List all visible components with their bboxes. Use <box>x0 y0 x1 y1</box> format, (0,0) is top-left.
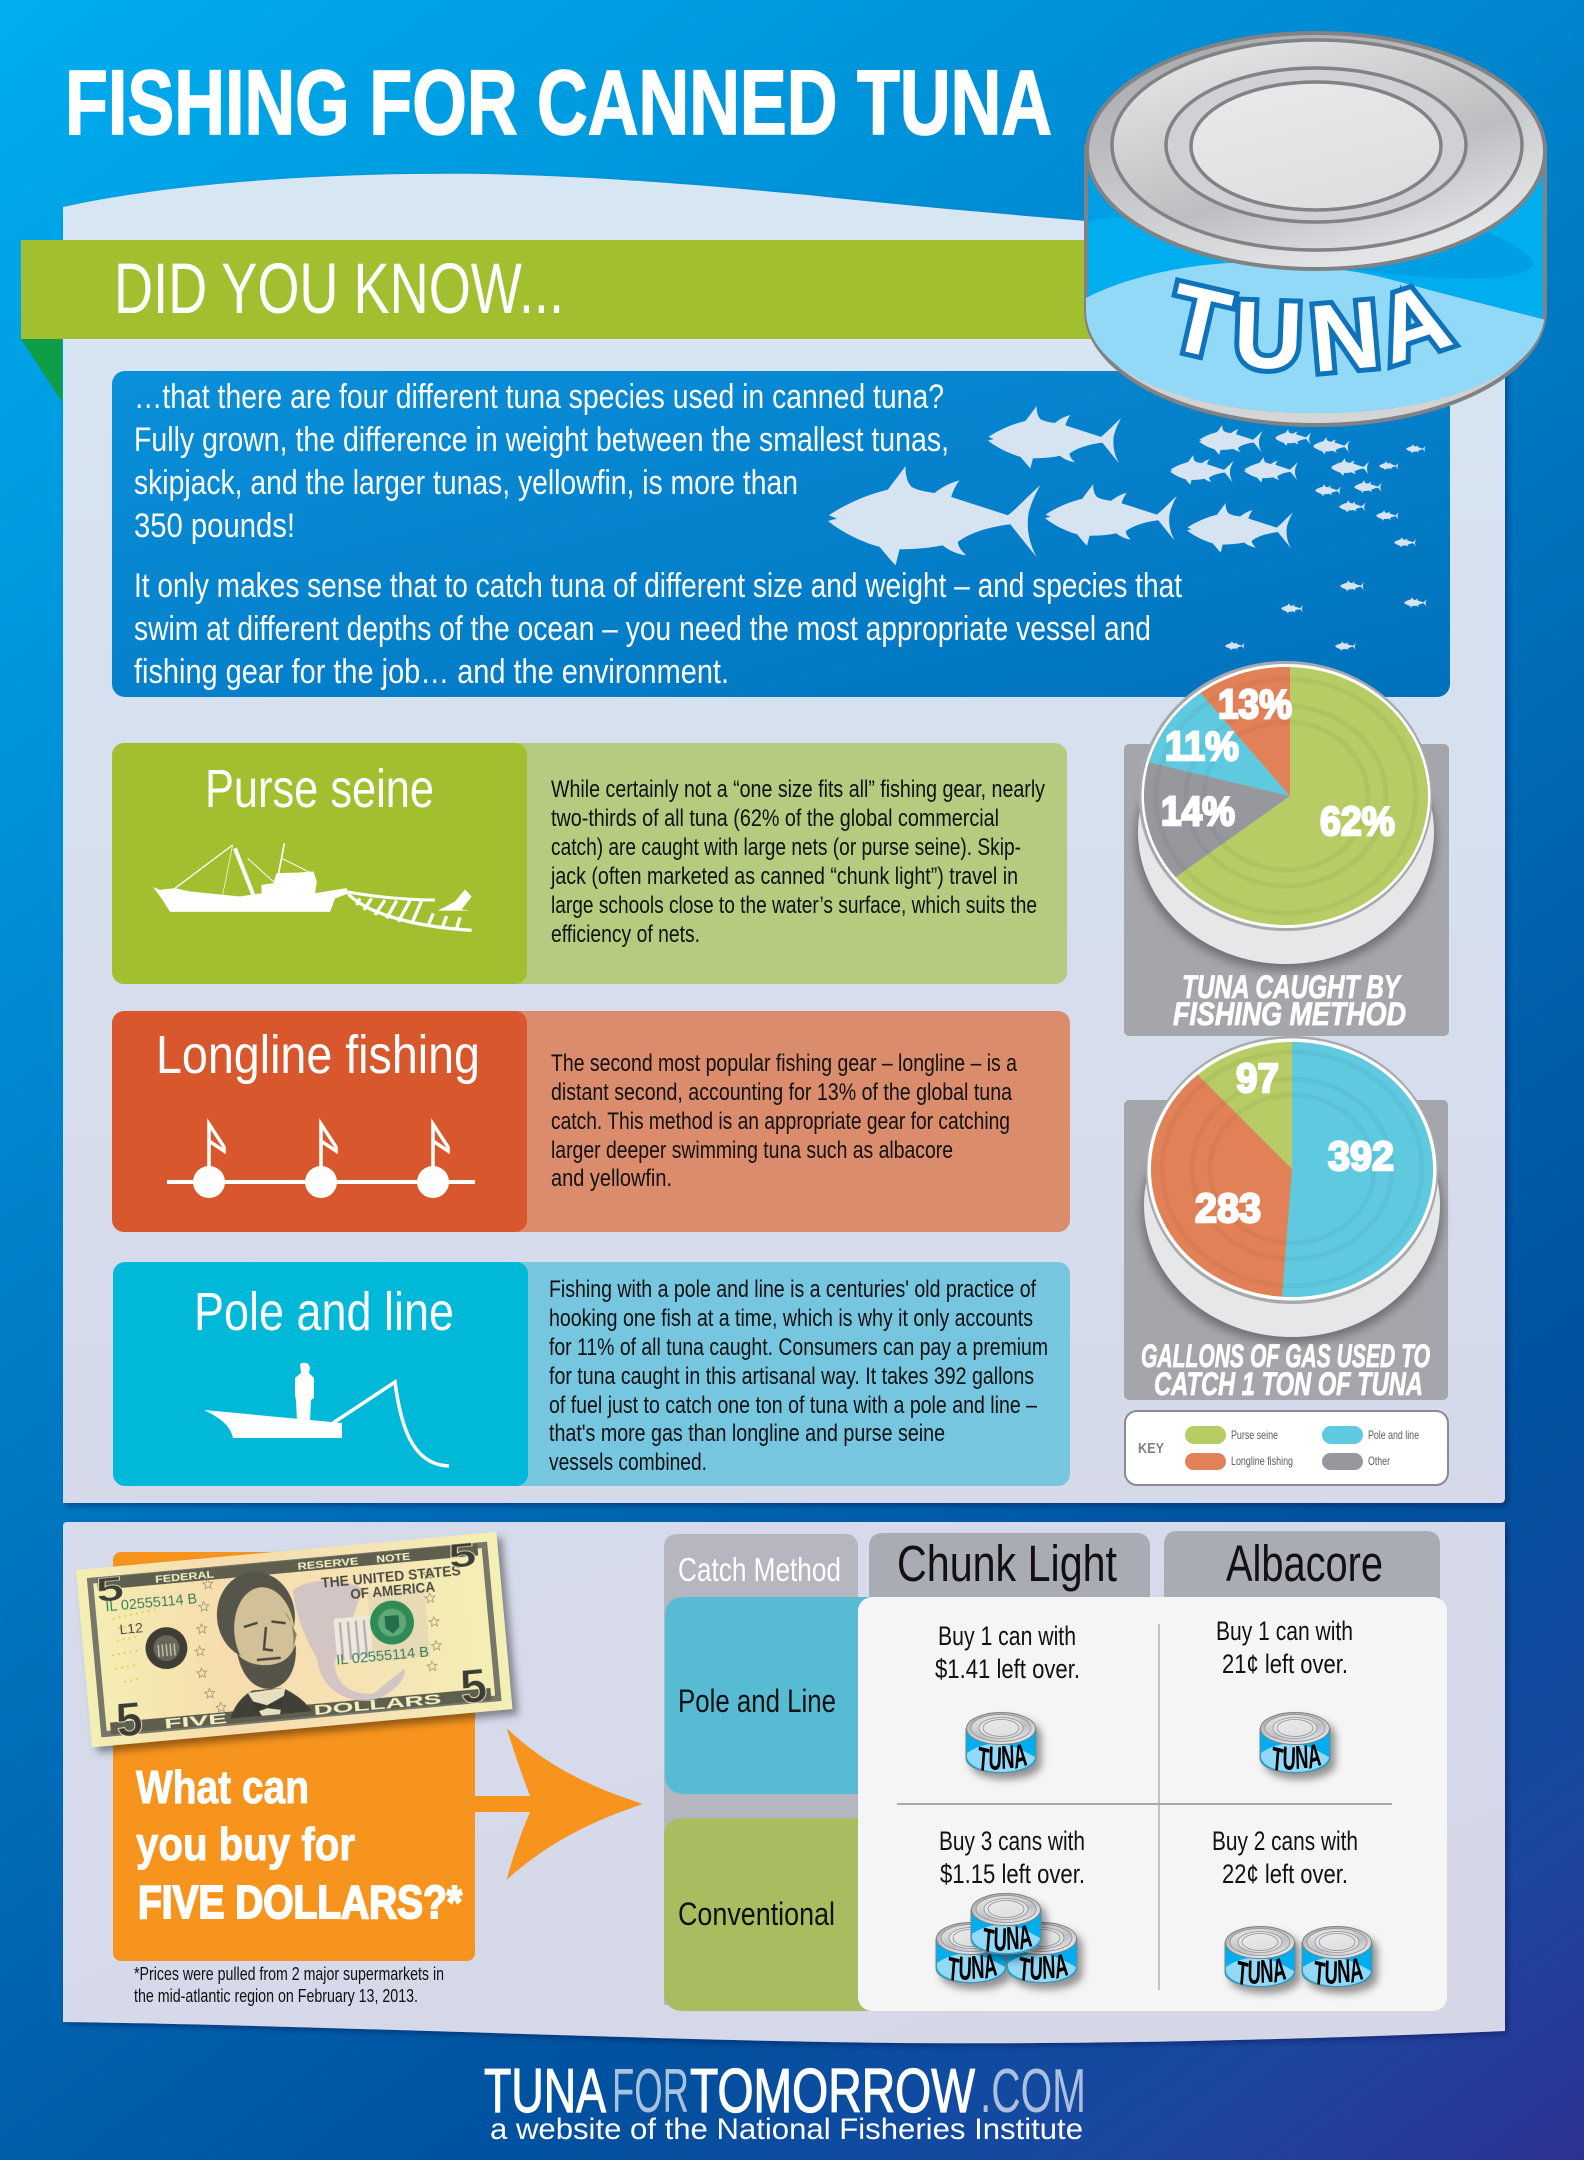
chart: gallons of gas used <box>1124 1036 1449 1400</box>
footer: tagline: a website of the National Fisheries Institute <box>490 2113 1083 2146</box>
icon: large tuna can <box>1086 33 1550 430</box>
chart caption <box>1141 1338 1430 1402</box>
bill text: 5 <box>447 1536 478 1576</box>
text block: pole and line: vessels combined. <box>549 1449 707 1476</box>
text block: purse seine: efficiency of nets. <box>551 921 700 948</box>
icon: three cans <box>936 1894 1077 1987</box>
chart caption: TUNA CAUGHT BY <box>1182 969 1402 1005</box>
illustration: five dollar bill: L12 <box>119 1619 144 1637</box>
pie labels: 392 <box>1328 1133 1394 1179</box>
seals <box>144 1625 189 1671</box>
table: price comparison: Pole and Line <box>678 1683 836 1719</box>
cell: conventional, albacore: Buy 2 cans with <box>1212 1826 1358 1856</box>
icon: purse seine vessel <box>153 843 472 930</box>
bill text: FIVE <box>164 1710 228 1732</box>
bill text: DOLLARS <box>313 1690 442 1718</box>
can label <box>1159 263 1462 393</box>
footnote: *Prices were pulled from 2 major supermarkets in <box>134 1964 444 1984</box>
icon: three cans: TUNA <box>1017 1947 1070 1987</box>
icon: pole and line boat <box>204 1363 449 1466</box>
icon: can <box>966 1712 1036 1777</box>
heading: pole and line: Pole and line <box>194 1282 454 1342</box>
column header: albacore <box>1164 1531 1440 1600</box>
table: price comparison: Conventional <box>678 1896 835 1932</box>
text block: pole and line: hooking one fish at a time, which is why it only accounts <box>549 1305 1033 1332</box>
icon: two cans: TUNA <box>1235 1951 1288 1991</box>
yellow dots <box>108 1609 166 1683</box>
footer: website: TOMORROW <box>690 2057 975 2126</box>
illustration: five dollar bill: IL 02555114 B <box>335 1643 430 1669</box>
icon: two cans <box>1225 1926 1372 1991</box>
text block: pole and line: for tuna caught in this artisanal way. It takes 392 gallons <box>549 1363 1034 1390</box>
heading: longline fishing: Longline fishing <box>156 1025 480 1085</box>
pie labels: 13% <box>1218 681 1292 727</box>
table: price comparison: Chunk Light <box>897 1535 1117 1592</box>
heading: what can you buy: What can <box>136 1761 309 1813</box>
text block: species: 350 pounds! <box>134 507 295 545</box>
footnote: the mid-atlantic region on February 13, 2013. <box>134 1986 418 2006</box>
text block: purse seine: jack (often marketed as canned “chunk light”) travel in <box>550 863 1018 890</box>
text block: species <box>134 378 1182 691</box>
legend: key: KEY <box>1138 1440 1164 1457</box>
text block: longline: The second most popular fishing gear – longline – is a <box>551 1050 1018 1077</box>
heading: what can you buy: you buy for <box>136 1818 355 1870</box>
bill text: 5 <box>113 1693 145 1748</box>
row header: pole and line <box>665 1597 880 1794</box>
cell: conventional, chunk light: $1.15 left over. <box>940 1859 1085 1889</box>
text block: longline: and yellowfin. <box>551 1165 672 1192</box>
text block: species: …that there are four different tuna species used in canned tuna? <box>134 378 944 416</box>
chart caption <box>1173 969 1406 1032</box>
can label: A <box>1364 263 1462 385</box>
text block: pole and line <box>549 1276 1048 1476</box>
pie labels: 62% <box>1320 798 1395 844</box>
title: FISHING FOR CANNED TUNA <box>65 52 1052 154</box>
icon: can <box>1260 1712 1330 1777</box>
can label: N <box>1306 281 1384 393</box>
illustration: five dollar bill: IL 02555114 B <box>105 1590 198 1615</box>
text block: pole and line: that's more gas than longline and purse seine <box>549 1420 945 1447</box>
eagle and shield <box>292 1572 434 1707</box>
text block: purse seine: catch) are caught with large nets (or purse seine). Skip- <box>551 834 1021 861</box>
column header: catch method <box>664 1534 858 2005</box>
cell: conventional, albacore <box>1212 1826 1358 1889</box>
icon: can: TUNA <box>1270 1737 1323 1777</box>
icon: two cans: TUNA <box>1312 1951 1365 1991</box>
text block: longline <box>551 1050 1018 1192</box>
chart caption: CATCH 1 TON OF TUNA <box>1154 1366 1423 1402</box>
text block: longline: larger deeper swimming tuna such as albacore <box>551 1137 953 1164</box>
text block: species: fishing gear for the job… and the environment. <box>134 653 729 691</box>
pie labels: 283 <box>1195 1185 1261 1231</box>
text block: longline: catch. This method is an appropriate gear for catching <box>551 1108 1010 1135</box>
table body <box>858 1597 1447 2011</box>
text block: species: skipjack, and the larger tunas, yellowfin, is more than <box>134 464 798 502</box>
text block: pole and line: of fuel just to catch one ton of tuna with a pole and line – <box>549 1392 1038 1419</box>
bill text: FEDERAL <box>155 1570 215 1586</box>
can label: T <box>1159 264 1239 380</box>
chart caption: FISHING METHOD <box>1173 996 1406 1032</box>
cell: pole and line, albacore <box>1216 1616 1353 1679</box>
can label: U <box>1232 282 1304 390</box>
icon: three cans: TUNA <box>946 1947 999 1987</box>
table: price comparison <box>664 1531 1447 2011</box>
legend: key <box>1125 1411 1448 1485</box>
cell: pole and line, albacore: 21¢ left over. <box>1222 1649 1348 1679</box>
panel: longline fishing <box>112 1011 1070 1232</box>
text block: purse seine: large schools close to the water’s surface, which suits the <box>551 892 1037 919</box>
legend: key: Longline fishing <box>1231 1454 1293 1468</box>
cell: pole and line, chunk light <box>935 1621 1080 1684</box>
bill text: OF AMERICA <box>350 1579 436 1603</box>
footer: website: .COM <box>980 2057 1086 2126</box>
heading banner <box>21 240 1111 339</box>
pie labels <box>1161 681 1395 844</box>
column header: chunk light <box>869 1533 1150 1600</box>
row header: conventional <box>664 1818 880 2011</box>
cell: conventional, chunk light: Buy 3 cans with <box>939 1826 1085 1856</box>
heading: purse seine: Purse seine <box>205 759 434 819</box>
pie labels: 14% <box>1161 788 1235 834</box>
text block: species: It only makes sense that to catch tuna of different size and weight – and species that <box>134 567 1182 605</box>
icon: can: TUNA <box>976 1737 1029 1777</box>
cell: pole and line, chunk light: Buy 1 can with <box>938 1621 1076 1651</box>
icon: longline <box>167 1124 475 1198</box>
legend: key: Purse seine <box>1231 1428 1278 1442</box>
pie labels: 97 <box>1236 1055 1279 1101</box>
icon: school of tuna <box>828 406 1427 651</box>
cell: pole and line, chunk light: $1.41 left over. <box>935 1654 1080 1684</box>
legend: key: Other <box>1368 1454 1390 1468</box>
panel: purse seine <box>112 743 1067 984</box>
chart: tuna caught by fishing method <box>1124 661 1449 1036</box>
text block: purse seine: two-thirds of all tuna (62% of the global commercial <box>551 805 999 832</box>
legend: key: Pole and line <box>1368 1428 1419 1442</box>
bill text: RESERVE <box>297 1556 359 1573</box>
panel: tuna species text box <box>112 371 1450 697</box>
heading: did you know: DID YOU KNOW... <box>114 250 564 329</box>
text block: purse seine <box>550 776 1045 948</box>
stars <box>188 1559 446 1714</box>
bill text <box>94 1536 491 1749</box>
pie labels <box>1195 1055 1394 1231</box>
cell: pole and line, albacore: Buy 1 can with <box>1216 1616 1353 1646</box>
text block: pole and line: Fishing with a pole and line is a centuries' old practice of <box>549 1276 1036 1303</box>
bill text: NOTE <box>376 1552 411 1566</box>
pie labels: 11% <box>1165 723 1239 769</box>
heading banner fold <box>21 339 62 402</box>
table: price comparison: Albacore <box>1226 1535 1383 1592</box>
panel: did you know <box>21 174 1505 1503</box>
footer: website <box>484 2057 1086 2146</box>
text block: longline: distant second, accounting for 13% of the global tuna <box>551 1079 1013 1106</box>
text block: pole and line: for 11% of all tuna caught. Consumers can pay a premium <box>549 1334 1048 1361</box>
panel: pole and line <box>113 1262 1070 1486</box>
arrow <box>475 1728 643 1880</box>
cell: conventional, chunk light <box>939 1826 1085 1889</box>
cell: conventional, albacore: 22¢ left over. <box>1222 1859 1348 1889</box>
text block: purse seine: While certainly not a “one size fits all” fishing gear, nearly <box>551 776 1045 803</box>
illustration: five dollar bill <box>76 1532 513 1750</box>
icon: three cans: TUNA <box>981 1918 1034 1958</box>
footnote <box>134 1964 444 2006</box>
table: price comparison: Catch Method <box>678 1551 841 1588</box>
footer: website: TUNA <box>484 2057 606 2126</box>
text block: species: Fully grown, the difference in weight between the smallest tunas, <box>134 421 949 459</box>
panel: what can you buy <box>63 1522 1505 2043</box>
bill text: THE UNITED STATES <box>320 1562 461 1592</box>
portrait <box>213 1568 312 1719</box>
heading: what can you buy <box>136 1761 462 1928</box>
chart caption: GALLONS OF GAS USED TO <box>1141 1338 1430 1374</box>
bill text: 5 <box>458 1659 489 1715</box>
callout: five dollars <box>113 1552 475 1961</box>
heading: what can you buy: FIVE DOLLARS?* <box>138 1876 462 1928</box>
bill text: 5 <box>94 1570 126 1610</box>
footer: website: FOR <box>612 2057 689 2126</box>
text block: species: swim at different depths of the ocean – you need the most appropriate vessel and <box>134 610 1151 648</box>
